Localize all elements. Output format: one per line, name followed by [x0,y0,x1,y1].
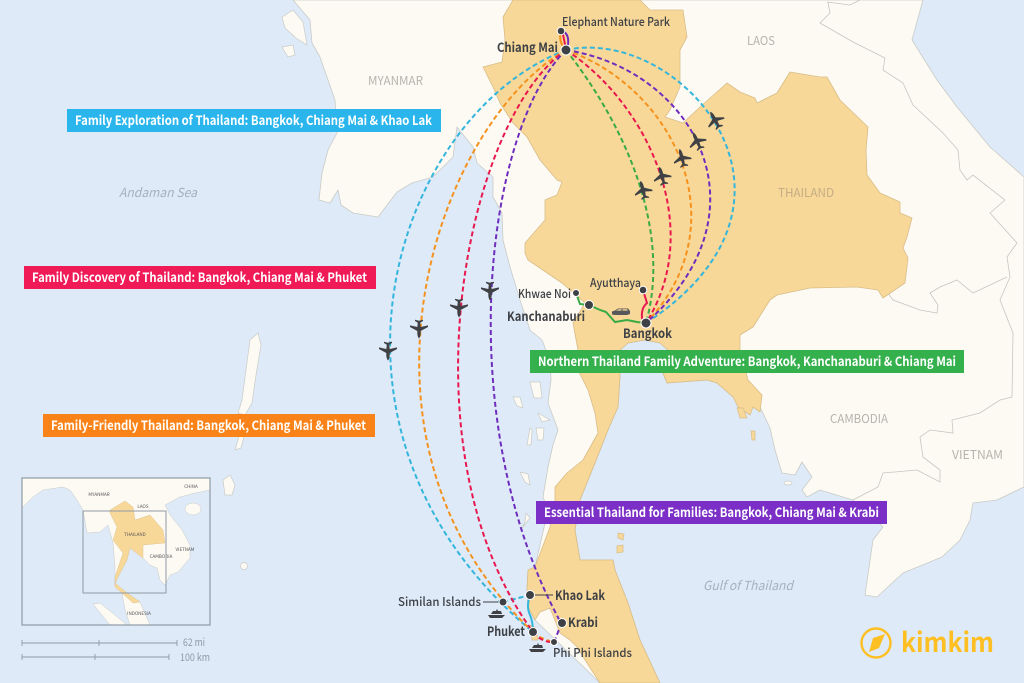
place names: Khwae Noi [518,285,571,302]
route: Essential Thailand (purple) [491,31,710,642]
country borders [820,0,1017,500]
icon: boat near Similan [488,609,505,618]
inset locator map: CAMBODIA [150,554,173,560]
place names [398,13,672,661]
place names: Ayutthaya [590,274,641,291]
map base: islands [223,10,792,570]
place names: Khao Lak [555,585,605,604]
inset locator map: MYANMAR [88,492,110,498]
icon: car [612,308,630,315]
country and sea labels: Andaman Sea [119,182,198,201]
label: Essential Thailand for Families: Essential Thailand for Families: Bangkok, Chiang Mai & Krabi [544,502,879,521]
plane icons [379,107,727,360]
route: Family Exploration (blue) [390,48,735,632]
leader lines [483,595,553,602]
place names: Bangkok [623,323,672,342]
country and sea labels: MYANMAR [368,72,423,89]
label: Family Exploration of Thailand: Family Exploration of Thailand: Bangkok, Chiang Mai & Khao Lak [75,110,432,129]
logo: kimkim: kimkim [901,621,994,660]
place names: Chiang Mai [497,37,558,56]
Thailand [483,0,912,683]
route: Northern Thailand (green) [566,50,653,323]
country and sea labels: THAILAND [778,184,834,201]
place names: Kanchanaburi [507,306,585,325]
inset locator map: INDONESIA [127,611,151,617]
inset locator map: VIETNAM [176,547,195,553]
route: Family-Friendly (orange) [419,31,691,642]
label: Family Discovery of Thailand: Family Discovery of Thailand: Bangkok, Chiang Mai & Phuket [32,267,367,286]
inset locator map: THAILAND [124,532,146,538]
map base: neighbouring land [293,0,1024,683]
route: Family Discovery (red) [458,31,671,642]
inset locator map: CHINA [184,484,198,490]
place names: Similan Islands [398,593,481,610]
country and sea labels [119,32,1003,594]
logo: kimkim [862,621,994,660]
inset locator map: LAOS [137,504,149,510]
place names: Krabi [568,612,598,631]
inset locator map [22,478,210,625]
country and sea labels: VIETNAM [952,446,1003,463]
scale bars [22,635,210,665]
country and sea labels: LAOS [747,32,775,49]
place names: Elephant Nature Park [562,13,670,30]
scale bars: 62 mi [183,635,205,650]
scale bars: 100 km [180,650,210,665]
icon: boat near Phi Phi [529,643,546,652]
place names: Phi Phi Islands [553,644,632,661]
label: Family-Friendly Thailand: Family-Friendly Thailand: Bangkok, Chiang Mai & Phuket [51,415,366,434]
Thai islands and Phuket [530,408,755,640]
label: Northern Thailand Family Adventure: Northern Thailand Family Adventure: Bangkok, Kanchanaburi & Chiang Mai [538,351,956,370]
country and sea labels: Gulf of Thailand [703,575,795,594]
country and sea labels: CAMBODIA [830,410,889,427]
location markers [499,27,651,645]
place names: Phuket [487,621,525,640]
